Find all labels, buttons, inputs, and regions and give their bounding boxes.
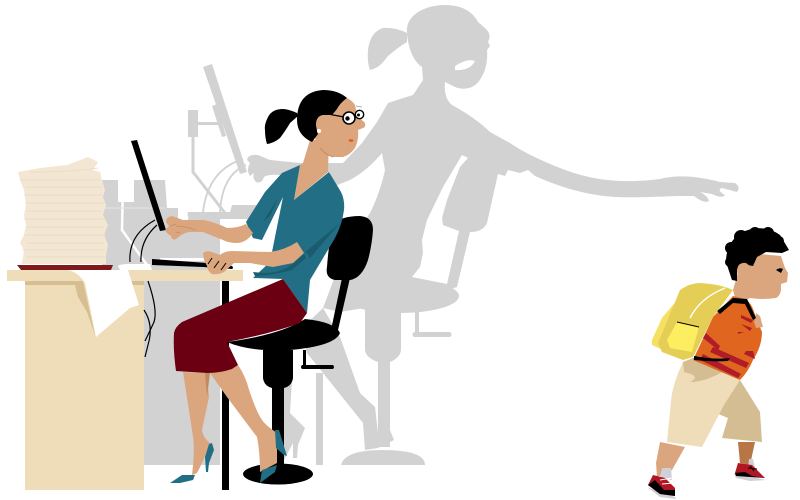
ear (316, 116, 328, 134)
boy (647, 227, 789, 499)
boy shorts shade (683, 358, 722, 382)
skirt (174, 279, 307, 373)
back leg (183, 372, 210, 475)
desk pedestal (25, 281, 144, 490)
glasses (328, 106, 364, 124)
front leg (210, 365, 277, 472)
teal blouse (246, 165, 344, 313)
boy eye (776, 268, 783, 273)
office chair (227, 216, 373, 484)
shadow monitor and arm (188, 64, 247, 213)
boy shorts near leg (667, 360, 740, 447)
chair column (263, 350, 293, 465)
ponytail (265, 109, 298, 144)
front shoe (260, 430, 287, 483)
shadow woman upper body and outstretched arm (247, 5, 739, 312)
boy shorts far leg (716, 380, 762, 442)
jaw line (320, 148, 333, 157)
main zipper (690, 288, 725, 318)
boy head (733, 254, 788, 300)
desk shadow fold (75, 281, 95, 335)
chair seat (227, 319, 340, 350)
fingers upper hand (170, 224, 196, 233)
sheet edges (20, 168, 106, 257)
shadow chair (341, 279, 459, 465)
fingers lower hand (208, 258, 226, 270)
paper tray (17, 265, 113, 270)
back shoe (170, 443, 214, 483)
lower arm and hand (203, 242, 304, 274)
boy rear leg (656, 442, 685, 477)
boy front shoe (734, 459, 766, 481)
hair (297, 90, 347, 142)
chair lever (301, 350, 334, 369)
upper arm and hand (165, 216, 253, 243)
mouse pad (118, 264, 152, 270)
boy shirt stripes (700, 315, 755, 378)
chair post (331, 278, 350, 330)
boy rear shoe (647, 468, 676, 499)
shadow scene: grey silhouette (102, 5, 739, 465)
backpack (652, 283, 733, 360)
blouse shade (253, 198, 340, 276)
back leg shade (205, 373, 210, 397)
woman (165, 90, 365, 483)
shadow legs and shoe (283, 308, 394, 465)
keyboard (152, 258, 233, 269)
chair back (327, 216, 373, 280)
chair base (243, 464, 313, 484)
boy ear (737, 263, 750, 281)
desk (7, 270, 243, 490)
backpack body (658, 283, 733, 360)
backpack straps (694, 298, 756, 361)
boy hand (754, 313, 763, 328)
earring (317, 129, 321, 133)
desk leg (222, 281, 229, 490)
backpack side pocket (652, 287, 690, 350)
monitor (131, 140, 166, 231)
backpack front pocket (667, 322, 699, 352)
head (312, 97, 365, 157)
hanging white paper (68, 270, 139, 337)
neck and chest (294, 140, 329, 200)
lips (348, 139, 354, 142)
cables (130, 220, 157, 357)
boy front leg (738, 442, 755, 465)
paper stack (17, 157, 113, 270)
boy shirt (693, 296, 762, 380)
pocket zipper (677, 322, 699, 327)
boy hair (725, 227, 789, 281)
stacked sheets (18, 157, 108, 264)
desk shadow band (25, 281, 144, 285)
shadow desk and clutter (102, 180, 262, 465)
desk top (7, 270, 243, 281)
